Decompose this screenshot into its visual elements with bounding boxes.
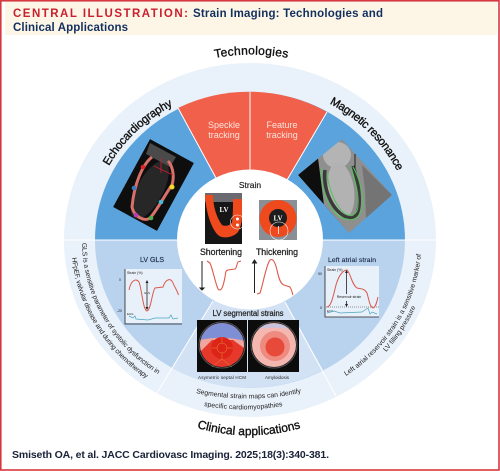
text: left atrial description line 2: LV filling pressure — [383, 306, 415, 352]
heading: Clinical applications: Clinical applications — [198, 420, 300, 438]
centre circle — [177, 170, 323, 310]
chart: Left atrial strain: 50 — [318, 272, 322, 276]
citation: Smiseth OA, et al. JACC Cardiovasc Imaging. 2025;18(3):340-381. — [12, 449, 329, 461]
label: Feature tracking: Feature — [266, 120, 298, 130]
text: GLS description line 1: GLS is a sensitive parameter of systolic dysfunction in — [82, 243, 160, 374]
short-axis LV image — [259, 200, 297, 240]
caption: Amyloidosis: Amyloidosis — [265, 375, 290, 380]
label: Shortening: Shortening — [200, 247, 242, 257]
strain map: amyloidosis — [248, 320, 299, 372]
strain tracking markers — [132, 165, 174, 220]
chart: LV GLS: ECG — [127, 312, 134, 316]
panel: lower light blue half — [95, 240, 405, 388]
title: Clinical Applications — [13, 22, 128, 34]
header band — [5, 2, 497, 35]
title: Strain Imaging: Technologies and — [193, 8, 383, 20]
chart: LV GLS: Strain (%) — [127, 271, 143, 275]
text: segmental maps description line 1: Segmental strain maps can identify — [196, 388, 300, 400]
long-axis LV image: LV — [219, 206, 229, 214]
heading: Strain: Strain — [239, 180, 261, 190]
panel: LV segmental wedge — [172, 301, 323, 388]
label: Left atrial strain: Left atrial strain — [328, 257, 376, 264]
strain map: asymmetric septal HCM — [197, 320, 247, 372]
chart: LV GLS: -20 — [117, 309, 122, 313]
chart: Left atrial strain: Strain (%) — [327, 268, 343, 272]
heading: Technologies: Technologies — [214, 46, 288, 58]
panel: upper blue half — [95, 92, 405, 240]
chart: Left atrial strain: Reservoir strain — [337, 295, 361, 299]
panel: speckle and feature tracking wedge — [178, 92, 327, 180]
text: segmental maps description line 2: specific cardiomyopathies — [204, 402, 282, 410]
outer ring — [64, 63, 436, 417]
caption: Asymetric septal HCM: Asymetric septal HCM — [198, 375, 246, 380]
label: Thickening: Thickening — [256, 247, 298, 257]
label: LV GLS: LV GLS — [140, 257, 164, 264]
magnetic resonance image — [298, 139, 392, 233]
chart: LV GLS: 0 — [119, 278, 121, 282]
label: Speckle tracking: Speckle — [208, 120, 240, 130]
label: Magnetic resonance: Magnetic resonance — [330, 96, 402, 170]
title: CENTRAL ILLUSTRATION: — [13, 8, 188, 20]
chart: LV GLS — [117, 269, 182, 324]
chart: LV GLS: GLS — [144, 291, 150, 295]
text: GLS description line 2: HFpEF, valvular disease and during chemotherapy — [72, 258, 148, 378]
label: Echocardiography: Echocardiography — [102, 100, 171, 166]
short-axis LV image: LV — [273, 214, 283, 222]
label: LV segmental strains: LV segmental strains — [212, 309, 284, 318]
chart: Left atrial strain — [318, 266, 379, 317]
label: Feature tracking: tracking — [266, 130, 298, 140]
chart: Left atrial strain: ECG — [327, 309, 334, 313]
thickening curve with arrow — [252, 259, 293, 295]
circular diagram — [64, 63, 436, 417]
shortening curve with arrow — [200, 261, 241, 290]
chart: Left atrial strain: 0 — [320, 306, 322, 310]
text: left atrial description line 1: Left atrial reservoir strain is a sensitive marker of — [344, 254, 421, 376]
label: Speckle tracking: tracking — [208, 130, 240, 140]
echocardiography image — [113, 139, 194, 231]
dividers — [64, 92, 436, 396]
long-axis LV image — [205, 193, 244, 244]
